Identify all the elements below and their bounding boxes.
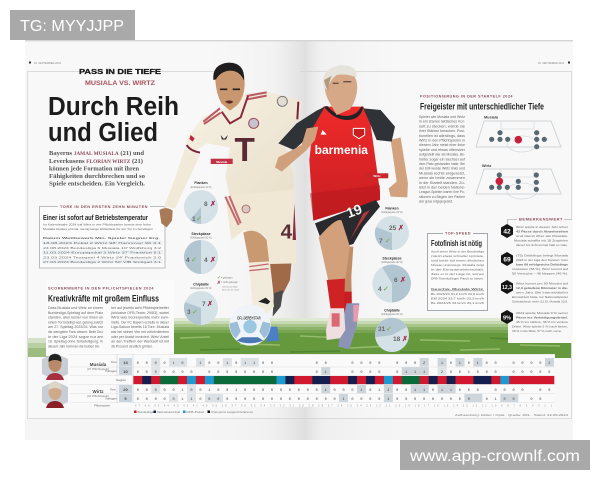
stat: 69: (75) Dribblings belegt Musiala [516, 254, 568, 258]
Wirtz name cell: Wirtz [93, 389, 104, 394]
head [325, 70, 357, 115]
pie legend: = nicht gelungen [221, 281, 239, 284]
pie chart: Musiala Flanken: 8 [204, 201, 208, 208]
stat: 12,3: 12,3 gelaufene Kilometer in die- [516, 286, 568, 290]
lede text [49, 150, 145, 188]
pie chart: Wirtz Flanken: 25 [389, 225, 397, 232]
table legend: Champions League/Conference [211, 410, 254, 414]
pie chart: Wirtz Flanken: Flanken [385, 206, 399, 210]
table legend [134, 410, 254, 414]
pie chart: Musiala Steckpässe: 4 [204, 257, 208, 264]
pie legend: ✓ [217, 275, 221, 280]
panel heading: Fotofinish ist nötig [431, 239, 482, 248]
pie chart: Wirtz Flanken: (Erfolgsquote 22 %) [381, 211, 403, 214]
lede text: Leverkusens FLORIAN WIRTZ (21) [49, 158, 143, 165]
small goals table: 18.08.2024 Pokal 2 Wirtz 98' Hannover 96 3:1 [43, 241, 162, 245]
stat: 9 percent: 38 % in die Mitte, 57 % nach vorne. [512, 329, 562, 333]
small goals table: 11.03.2024 Europapokal 3 Wirtz 37' Frankfurt 5:1 [43, 250, 161, 254]
pie chart: Wirtz Chipbälle: ✓ [386, 326, 392, 333]
panel body: Auch wenn Wirtz in der Bundesliga [431, 250, 484, 254]
panel: Fotofinish ist nötig [428, 231, 488, 310]
body column 2: melte. Der FC Bayern erzielte in dieser [111, 320, 170, 324]
crest [353, 128, 365, 139]
name tag: Wirtz [366, 173, 388, 178]
pie legend: Teilerfasste Bälle [222, 286, 239, 288]
match values: 000001001001000000000100010120011011000 0000 00 [137, 389, 557, 393]
kicker: POSITIONIERUNG IN DER STARTELF 2024 [420, 94, 513, 98]
body text: dem Platz gestanden hatte. Bei [419, 162, 465, 166]
name tag: Musiala [211, 159, 233, 164]
panel body: zuletzt etwas schneller sprintete, [431, 254, 484, 258]
body column 1 [48, 306, 104, 348]
match values [135, 362, 557, 408]
lede text: Spiele entscheiden. Ein Vergleich. [49, 180, 145, 188]
pie chart: Wirtz Chipbälle: (Erfolgsquote 63 %) [381, 313, 403, 316]
panel heading: Einer ist sofort auf Betriebstemperatur [43, 213, 148, 222]
panel body: sind beide auf einem ähnlichen [431, 258, 484, 262]
stat: 69: kam 69 erfolgreiche Dribblings [516, 262, 568, 266]
watermark: website [400, 440, 590, 470]
opponent band [133, 376, 554, 384]
pie chart: Musiala Chipbälle: 7 [202, 301, 206, 308]
formation pitch: Musiala [476, 116, 561, 152]
pie chart: Musiala Chipbälle: Chipbälle [193, 282, 209, 286]
panel: Einer ist sofort auf Betriebstemperatur [40, 205, 165, 268]
body text: aber genau entgegengesetzt. [419, 200, 453, 204]
heading: Freigeister mit unterschiedlicher Tiefe [420, 102, 544, 112]
body column 2: war bei seinen Vier mit vollverdientem [111, 330, 169, 334]
jersey [186, 92, 302, 197]
pie chart: Musiala Chipbälle: ✗ [207, 300, 213, 308]
kicker: Pass in die Tiefe: PASS IN DIE TIEFE [79, 67, 161, 76]
stat: 9 percent: 9% [503, 316, 511, 322]
page background [25, 40, 573, 440]
pie chart: Wirtz Steckpässe: ✓ [383, 286, 389, 293]
panel label: TOP-SPEED [445, 232, 471, 236]
pie chart: Musiala Flanken [184, 181, 218, 224]
shorts [225, 189, 296, 264]
body text: tionellen ist allerdings, dass [419, 134, 465, 138]
panel: Bemerkenswert [501, 218, 572, 343]
title [48, 93, 179, 147]
body text: hörter sogar ein Sechser auf [419, 157, 465, 161]
body text: Musiala rechts eingesetzt, [419, 171, 465, 175]
page date left [29, 61, 62, 65]
small goals table: 23.03.2024 Testspiel 4 Wirtz 24' Frankreich 2:0 [43, 255, 161, 259]
section kicker: SCORERWERTE IN DEN PFLICHTSPIELEN 2024 [48, 286, 154, 290]
speed table [431, 287, 484, 305]
watermark: TG: TG: MYYJJPP [20, 18, 124, 35]
stat: 69: 69 [503, 256, 511, 264]
panel body: in der Europameisterschaft, [431, 268, 484, 272]
title: und Glied [48, 119, 158, 147]
stat: 12,3 [501, 280, 568, 304]
panel label: TORE IN DEN ERSTEN ZEHN MINUTEN [60, 205, 148, 209]
body text: sett zu stecken, würde sie [419, 124, 465, 128]
pie chart: Wirtz Chipbälle: ✗ [402, 335, 408, 343]
match values: 0000000 00000000 01 0000 0111 2001000 00000 [137, 371, 557, 375]
panel intro [43, 222, 153, 231]
pie chart: Musiala Steckpässe: Steckpässe [191, 232, 211, 236]
body column 2: oder per Assist involviert. Wirtz' Anteil [111, 335, 169, 339]
front arm [275, 127, 318, 172]
boot [326, 308, 345, 340]
pie chart: Wirtz Steckpässe: 6 [394, 277, 398, 284]
rear leg [343, 247, 353, 293]
row labels: Pflichtspiele [94, 404, 110, 408]
panel body: Niveau unterwegs. Musiala zeigt [431, 263, 484, 267]
stat: 69 [501, 252, 568, 276]
pie chart: Wirtz Flanken: ✗ [398, 224, 404, 232]
pie chart: Wirtz Steckpässe [372, 256, 411, 303]
player: Jamal Musiala: 4 [281, 220, 293, 243]
stat: 9 percent: Drittel. Wirtz spielte 5 % nach hinten, [512, 324, 568, 328]
stat: 42 [501, 224, 568, 247]
Wirtz name cell: (44 Pflichtspiele) [87, 394, 109, 398]
panel intro: Im Kalenderjahr 2024 traf Wirtz in vier Pflichtspielen bereits eine frühe [43, 222, 151, 226]
pie legend [217, 275, 240, 292]
lede text: können jede Formation mit ihren [49, 166, 140, 172]
name tag: Musiala: Musiala [216, 160, 228, 164]
pie chart: Musiala Flanken: ✗ [210, 200, 216, 208]
page date left: 26. SEPTEMBER 2024 [34, 61, 62, 65]
formation pitch: Wirtz [476, 164, 561, 199]
body column 1: in der Liga 2024 sogar nur am [48, 335, 103, 339]
body text: der EM wurde Wirtz links und [419, 167, 465, 171]
stat: 42: Musiala schaffte mit 18 Zuspielen [514, 238, 568, 242]
boot [267, 327, 279, 342]
stat: 9 percent: 45 % ins mittlere, 38 % ins vordere [516, 320, 568, 324]
pie chart: Musiala Steckpässe [184, 232, 218, 274]
dark sleeves [278, 107, 325, 150]
stat: 12,3: 12,3 [502, 285, 512, 291]
kicker: Pass in die Tiefe: MUSIALA VS. WIRTZ [85, 80, 155, 87]
pie chart: Musiala Steckpässe: (Erfolgsquote 50 %) [190, 236, 212, 240]
body column 1: am 27. Spieltag 2023/24. Was nur [48, 325, 104, 329]
stat: 42: dieser Art nicht einmal halb so viele. [516, 243, 568, 247]
stat: 69: 50 Versuche – 46 klappen (46 %). [512, 272, 568, 276]
portrait: Musiala [42, 353, 68, 380]
player: Jamal Musiala [159, 63, 302, 342]
jersey logo: T [234, 132, 255, 169]
shorts [315, 200, 380, 247]
body column 1: Bundesliga-Spieltag auf dem Platz [48, 311, 103, 315]
front leg [319, 220, 350, 281]
body text: in ein starres taktisches Kor- [419, 120, 466, 124]
jersey [309, 107, 380, 221]
pie legend: ✗ [217, 280, 221, 285]
pie chart: Musiala Steckpässe: ✗ [210, 256, 216, 264]
pie chart: Musiala Steckpässe: ✓ [191, 257, 197, 264]
title: Durch Reih [48, 93, 179, 121]
kicker: Pass in die Tiefe [79, 67, 161, 87]
front leg [243, 231, 269, 264]
body column 1: standen, aber keiner von ihnen an [48, 316, 103, 320]
credit line: Aufbereitung: kicker / Opta · Quelle: DFL · Stand: 22.09.2024 [455, 413, 569, 417]
date right [538, 61, 570, 65]
pie legend: = gelungen [221, 278, 233, 280]
pie chart: Musiala Chipbälle [184, 282, 218, 325]
row labels: Gegner [116, 378, 126, 382]
player: Florian Wirtz: 19 [344, 201, 364, 221]
body column 2: Wirtz was Scorerpunkte mehr sam- [111, 316, 170, 320]
Wirtz name cell [87, 389, 109, 398]
lede text: Fähigkeiten durchbrechen und so [49, 173, 145, 180]
body text: spielte und etwas offensiver [419, 148, 466, 152]
shaded cells [151, 358, 554, 402]
pie chart: Musiala Steckpässe: 4 [186, 257, 190, 264]
pie chart: Musiala Flanken: Flanken [194, 181, 208, 185]
stat: 12,3: Wirtz kommt pro 90 Minuten auf [516, 282, 568, 286]
stat: 9 percent: 2024 spielte Musiala 9 % seiner [516, 311, 568, 315]
pie chart: Wirtz Chipbälle: 31 [378, 326, 386, 333]
body text: Wirtz in den Pflichtspielen in [419, 138, 465, 142]
ball print: DFL-DERBYSTAR [237, 315, 261, 320]
body column 1: 16. Spieltag ohne Torbeteiligung. In [48, 340, 103, 344]
body column 1: einem Tor beteiligt war, gelang zuletzt [48, 320, 103, 324]
row labels [94, 360, 126, 408]
table background [68, 354, 555, 407]
body column 2: her auf jeweils acht Pflichtspieltreffer [111, 306, 170, 310]
stat: 9 percent: Pässe ins Verteidigungsdrittel. [516, 316, 568, 320]
table legend: Bundesliga [138, 410, 154, 414]
match values: 000010 100101100 00 0000 0002 1010100 00002 [137, 362, 557, 366]
row labels: Tore [110, 388, 116, 392]
stat: 69: vorweisen (58 %). Wirtz kommt auf [512, 267, 568, 271]
match values: 00000110000000000000000100001000000000 0100 00 [137, 398, 548, 402]
small goals table: Datum Wettbewerb Min. Spieler Gegner Erg. [43, 236, 160, 240]
row labels: Vorlagen [105, 369, 117, 373]
body text [419, 115, 466, 204]
body column 1: die wenigsten Fans wissen: Beim Duo [48, 330, 103, 334]
pie chart: Musiala Flanken: 1 [192, 216, 196, 223]
left arm [164, 148, 200, 208]
pie chart: Wirtz Steckpässe: ✗ [400, 276, 406, 284]
section heading: Kreativkräfte mit großem Einfluss [48, 294, 159, 304]
section: Kreativkräfte mit großem Einfluss [46, 280, 174, 356]
head [215, 63, 245, 111]
player: Florian Wirtz [275, 65, 408, 349]
pie legend: Bereiche der 2024 [222, 288, 240, 292]
body text: wenn sie beide zusammen [419, 176, 465, 180]
panel label: BEMERKENSWERT [519, 218, 564, 222]
body text: letzt in den beiden Nations- [419, 186, 466, 190]
body column 1: diesem Jahr kommen die beiden bis- [48, 344, 101, 348]
match values: 47 46 45 44 43 42 41 40 39 38 37 36 35 34 33 32 31 30 29 28 27 26 25 24 23 22 21 20 19 18 17 16 15 14 13 12 11 10 9 8 7 6 5 4 3 2 1 [135, 404, 553, 408]
stat: 42: und damit öfter als Musiala. [516, 234, 568, 238]
pie chart: Wirtz Chipbälle [373, 308, 409, 352]
Musiala name cell [87, 362, 109, 371]
stat: 12,3: Einsatzzeit hatte nur Nationalspieler [512, 295, 568, 299]
small goals table: 27.03.2024 Bundesliga 2 Wirtz 50' VfB Stuttgart 3:1 [43, 260, 161, 264]
pie chart: Wirtz Steckpässe: (Erfolgsquote 40 %) [381, 261, 403, 264]
watermark: website: www.app-crownlf.com [409, 448, 580, 465]
speed table: Geschw. Musiala Wirtz [431, 287, 484, 291]
table legend: DFB-Pokal [186, 410, 204, 414]
body column 1: Dass Musiala und Wirtz an einem [48, 306, 103, 310]
section: Freigeister mit unterschiedlicher Tiefe [419, 61, 570, 204]
body text: sitionen zu Beginn der Partien [419, 195, 465, 199]
body text: Spieler wie Musiala und Wirtz [419, 115, 465, 119]
sponsor: barmenia [315, 143, 368, 157]
pie chart: Wirtz Flanken: ✓ [385, 238, 391, 245]
totals: 9 [124, 396, 127, 401]
table legend: Nationalmannschaft [157, 410, 180, 414]
stat: 9 percent [501, 310, 568, 333]
speed table: EM 2024 33,7 km/h 33,3 km/h [431, 296, 484, 300]
watermark: TG [10, 10, 135, 40]
stat: 12,3: Schlotterbeck mehr (12,5). Musiala 10,8. [512, 300, 568, 304]
totals: 14 [123, 360, 128, 365]
pie chart: Musiala Chipbälle: 3 [187, 309, 191, 316]
formation pitch: Wirtz: Wirtz [482, 164, 491, 168]
body column 2: an den Treffern der Werkself ist mit [111, 340, 169, 344]
speed table: BL 2024/25 33 km/h 34,1 km/h [431, 301, 484, 305]
pie chart: Musiala Chipbälle: ✓ [192, 309, 198, 316]
lede text: Bayerns JAMAL MUSIALA (21) und [49, 150, 145, 157]
stat: 42: 42 [503, 228, 511, 236]
totals: 10 [123, 369, 128, 374]
panel body: DFB-Teamkollegen Paroli zu bieten. [431, 276, 484, 280]
panel body: dass er in der Lage ist, seinen [431, 272, 484, 276]
Musiala name cell: Musiala [90, 362, 107, 367]
row labels: Vorlagen [105, 396, 117, 400]
small goals table [42, 236, 163, 264]
pie chart: Wirtz Flanken [375, 206, 409, 250]
body text: in der Startelf standen. Zu- [419, 181, 466, 185]
pie chart: Wirtz Chipbälle: Chipbälle [384, 308, 400, 312]
pie chart: Wirtz Chipbälle: 18 [393, 336, 401, 343]
body column 2: 36 Prozent deutlich größer. [111, 344, 153, 348]
speed table: BL 2023/24 34,2 km/h 34,6 km/h [431, 292, 484, 296]
body column 2: Liga-Saison bereits 16 Tore. Musiala [111, 325, 169, 329]
totals [119, 358, 132, 402]
date right: 26. SEPTEMBER 2024 [538, 61, 565, 65]
grid lines [68, 354, 555, 402]
formation pitch: Musiala: Musiala [484, 116, 499, 120]
name tag: Wirtz: Wirtz [373, 174, 381, 178]
Musiala name cell: (37 Pflichtspiele) [87, 367, 109, 371]
rear leg [270, 260, 292, 300]
pie chart: Wirtz Steckpässe: Steckpässe [382, 256, 402, 260]
body column 2 [111, 306, 170, 348]
panel body [431, 250, 484, 280]
small goals table: 24.08.2024 Bundesliga 6 Musiala 10' Wolfsburg 3:2 [43, 246, 161, 250]
pie chart: Wirtz Flanken: 7 [379, 238, 383, 245]
grass field [28, 320, 571, 352]
pie chart: Musiala Flanken: (Erfolgsquote 11 %) [191, 186, 212, 189]
pie chart: Musiala Chipbälle: (Erfolgsquote 30 %) [190, 287, 212, 290]
body text: League-Spielen waren ihre Po- [419, 190, 466, 194]
pie chart: Musiala Flanken: ✓ [196, 216, 202, 223]
body text: diesem Jahr meist eher linke [419, 143, 465, 147]
panel intro: Musiala bewies einmal, wenig lange Abläuftest für ein Tor zu benötigen [43, 227, 153, 231]
body column 2: (inklusive DFB-Team: 29/83), wobei [111, 311, 169, 315]
stat: 69: 2024 in der Liga den Topwert. Kein [516, 258, 568, 262]
row labels: Tore [111, 360, 117, 364]
right arm [389, 137, 408, 197]
football [229, 304, 271, 346]
stat: 42: 42 Pässe durch Abwehrreihen [516, 230, 568, 234]
stat: 42: Wirtz spielte in diesem Jahr schon [516, 225, 568, 229]
pie chart: Wirtz Steckpässe: 4 [378, 286, 382, 293]
stat: 12,3: sem Jahr. Bei Intensivläufen [516, 290, 568, 294]
body text: aufgestellt war als Musiala. Be- [419, 153, 466, 157]
body text: ihrer Stärken berauben. Posi- [419, 129, 466, 133]
totals: 20 [123, 387, 128, 392]
match table [68, 354, 557, 408]
portrait: Wirtz [42, 381, 68, 408]
